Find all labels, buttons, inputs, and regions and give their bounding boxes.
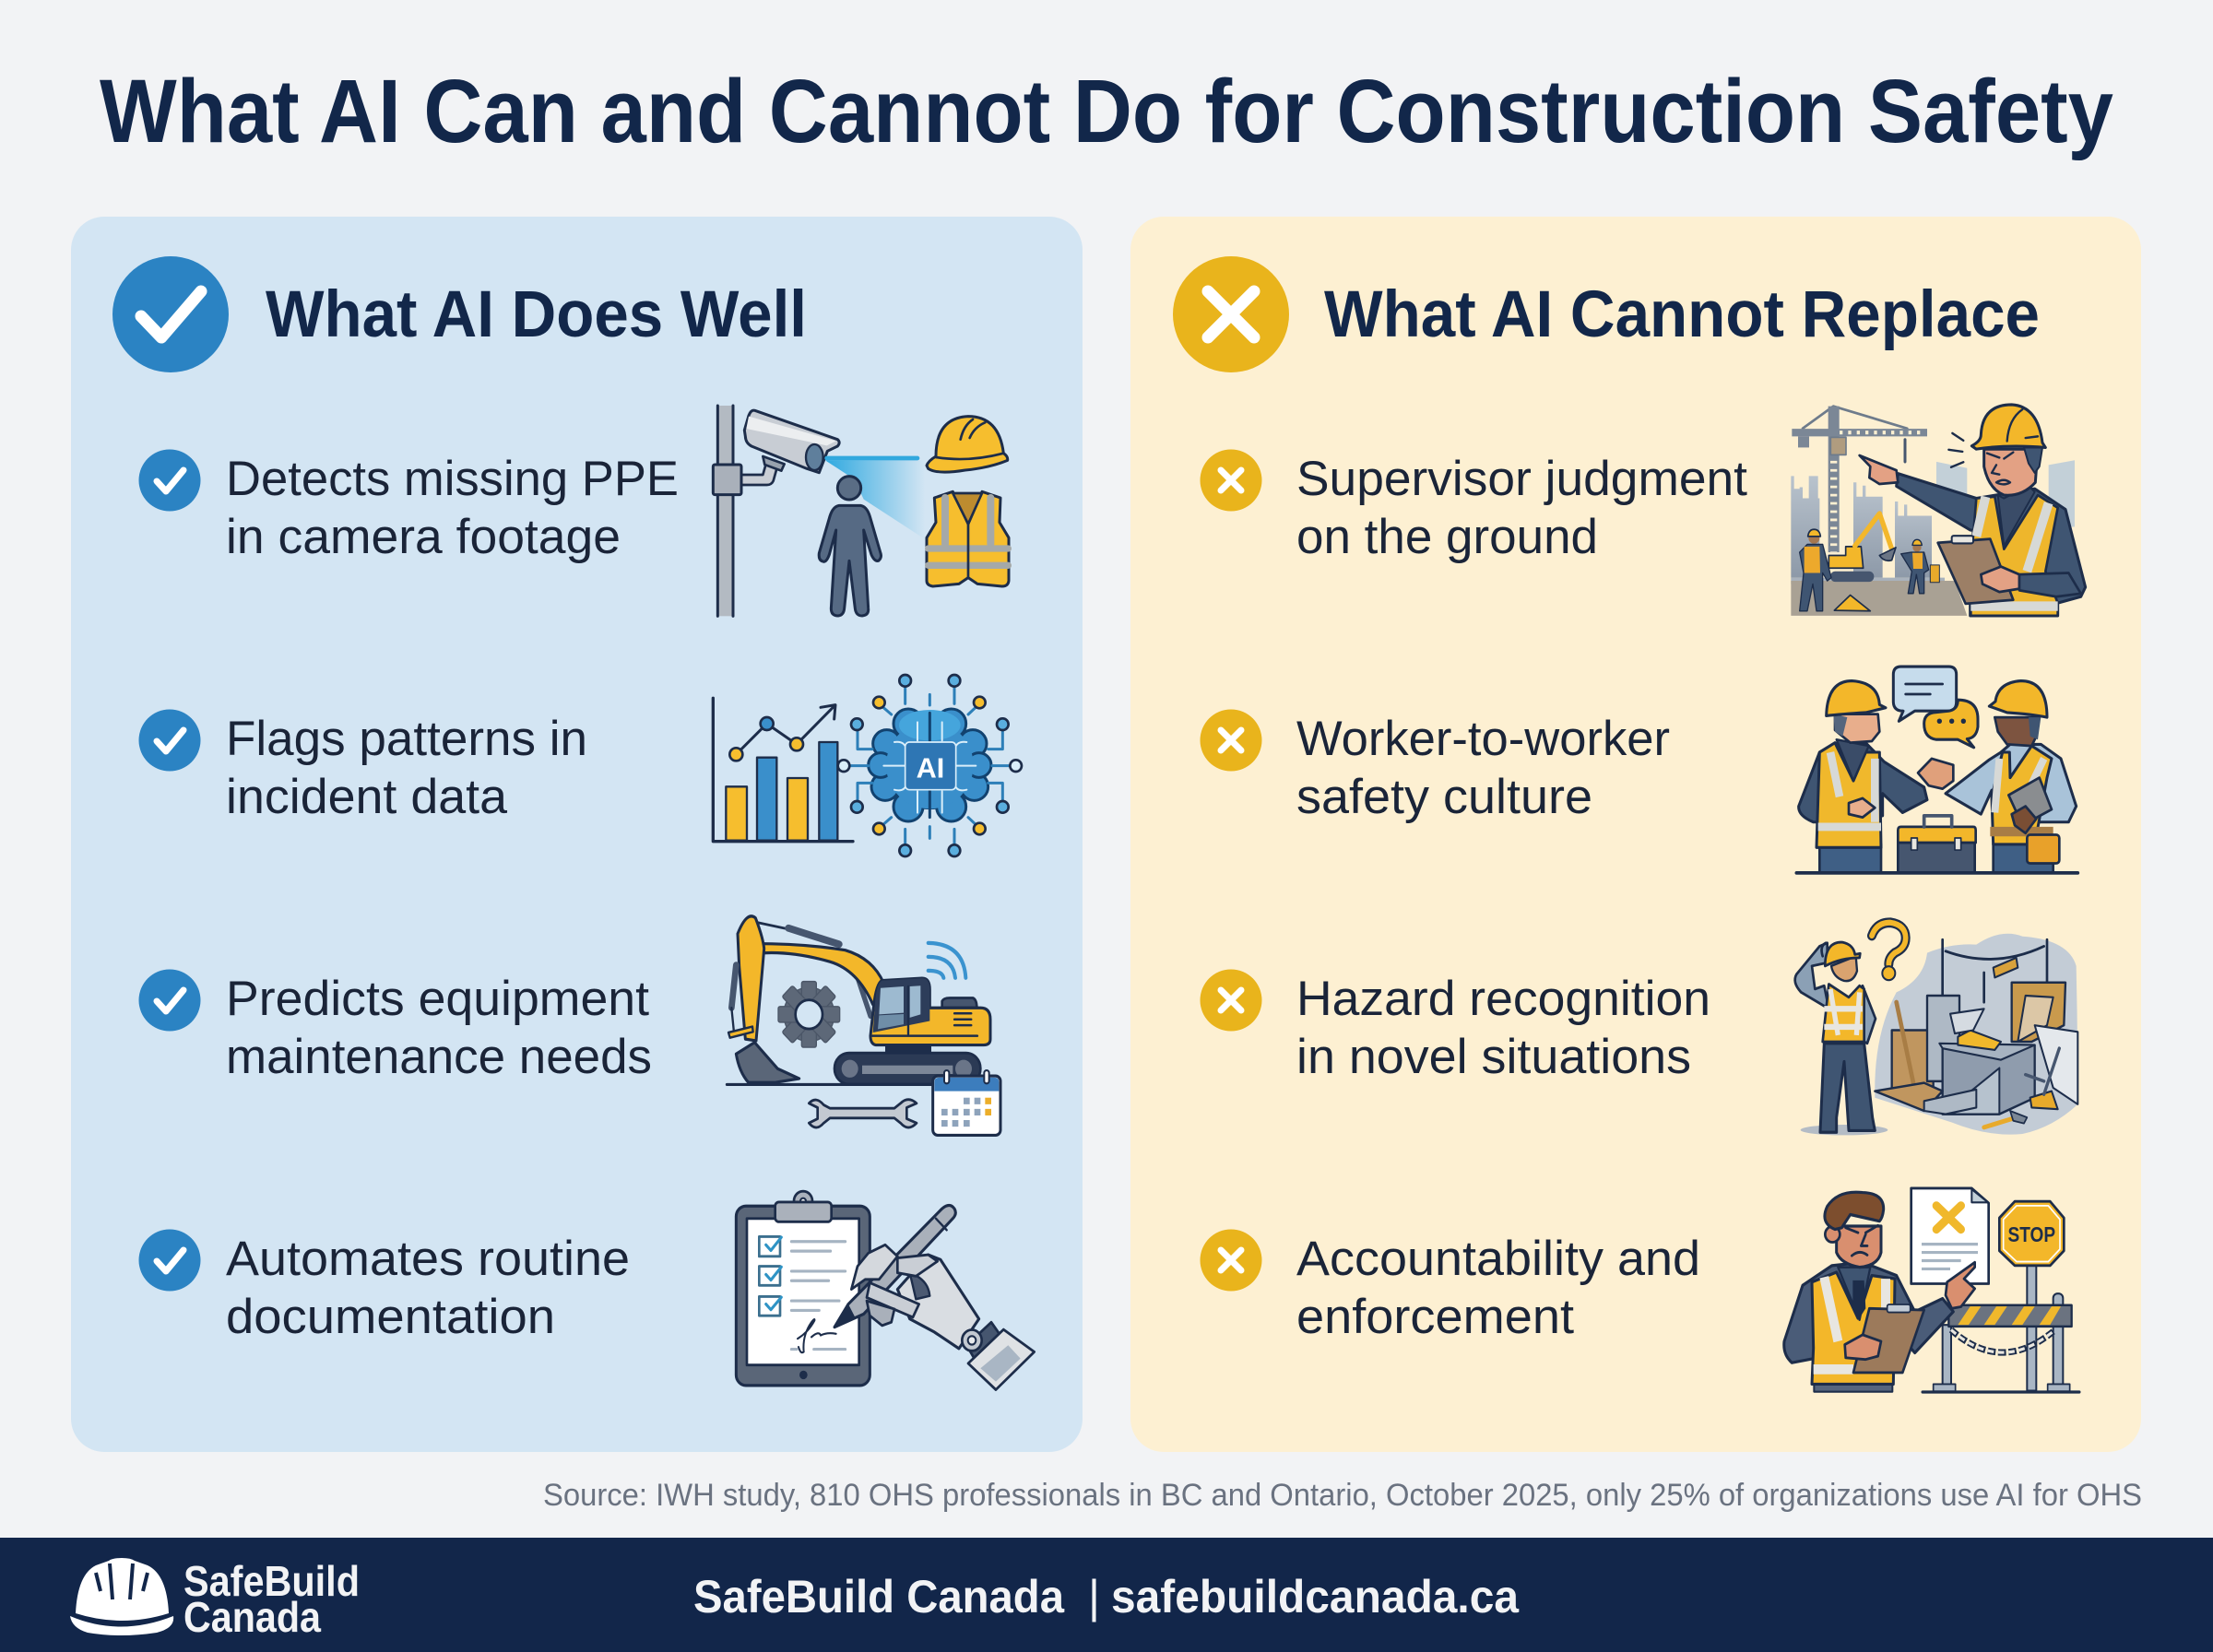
- panel: what AI does well: [71, 217, 1083, 1452]
- item: hazard recognition: in novel situations: [1296, 1030, 1691, 1084]
- icon: supervisor on site: [1791, 405, 2086, 616]
- heading: what AI does well: What AI Does Well: [266, 278, 807, 351]
- icon: chart and AI brain: AI: [917, 752, 944, 784]
- icon: camera, worker and PPE: [713, 406, 1009, 616]
- icon: enforcement officer and stop sign: STOP: [2007, 1222, 2055, 1246]
- item: hazard recognition: [1201, 970, 1710, 1084]
- logo: helmet: [70, 1558, 173, 1635]
- item: supervisor judgment: on the ground: [1296, 510, 1598, 564]
- source note: Source: IWH study, 810 OHS professionals in BC and Ontario, October 2025, only 25% of organizations use AI for OHS: [543, 1478, 2142, 1513]
- item: flags patterns: Flags patterns in: [226, 712, 587, 766]
- footer contact line: [693, 1571, 1520, 1622]
- icon: excavator, gear, wrench and calendar: [727, 916, 1000, 1135]
- panel: what AI cannot replace: [1130, 217, 2141, 1452]
- heading: what AI cannot replace: What AI Cannot Replace: [1324, 278, 2040, 351]
- logo wordmark: Canada: [183, 1593, 321, 1641]
- item: supervisor judgment: [1201, 450, 1747, 564]
- item: flags patterns: [138, 710, 587, 824]
- item: supervisor judgment: Supervisor judgment: [1296, 452, 1747, 506]
- item: predicts maintenance: Predicts equipment: [226, 972, 649, 1026]
- item: automates documentation: Automates routine: [226, 1232, 630, 1286]
- item: detects missing PPE: [138, 450, 679, 564]
- item: accountability: [1201, 1230, 1700, 1344]
- item: worker culture: [1201, 710, 1670, 824]
- item: automates documentation: documentation: [226, 1290, 555, 1344]
- item: accountability: enforcement: [1296, 1290, 1574, 1344]
- footer contact line: SafeBuild Canada: [693, 1571, 1065, 1622]
- icon: worker facing unknown hazard: [1795, 923, 2077, 1135]
- item: detects missing PPE: Detects missing PPE: [226, 452, 679, 506]
- item: detects missing PPE: in camera footage: [226, 510, 621, 564]
- item: predicts maintenance: [138, 970, 652, 1084]
- footer bar: [0, 1538, 2213, 1652]
- item: predicts maintenance: maintenance needs: [226, 1030, 652, 1084]
- footer contact line: safebuildcanada.ca: [1111, 1571, 1520, 1622]
- icon: clipboard and robot hand: [736, 1191, 1035, 1389]
- footer contact line: |: [1088, 1571, 1100, 1622]
- item: automates documentation: [138, 1230, 630, 1344]
- item: flags patterns: incident data: [226, 770, 508, 824]
- logo wordmark: SafeBuild: [183, 1557, 360, 1605]
- icon: large check badge: [112, 256, 229, 372]
- icon: large X badge: [1173, 256, 1289, 372]
- logo wordmark: [183, 1557, 360, 1641]
- icon: two workers talking: [1796, 667, 2077, 873]
- item: worker culture: Worker-to-worker: [1296, 712, 1670, 766]
- icon: enforcement officer and stop sign: [1784, 1188, 2079, 1392]
- item: worker culture: safety culture: [1296, 770, 1592, 824]
- item: accountability: Accountability and: [1296, 1232, 1700, 1286]
- item: hazard recognition: Hazard recognition: [1296, 972, 1710, 1026]
- icon: chart and AI brain: [713, 675, 1022, 856]
